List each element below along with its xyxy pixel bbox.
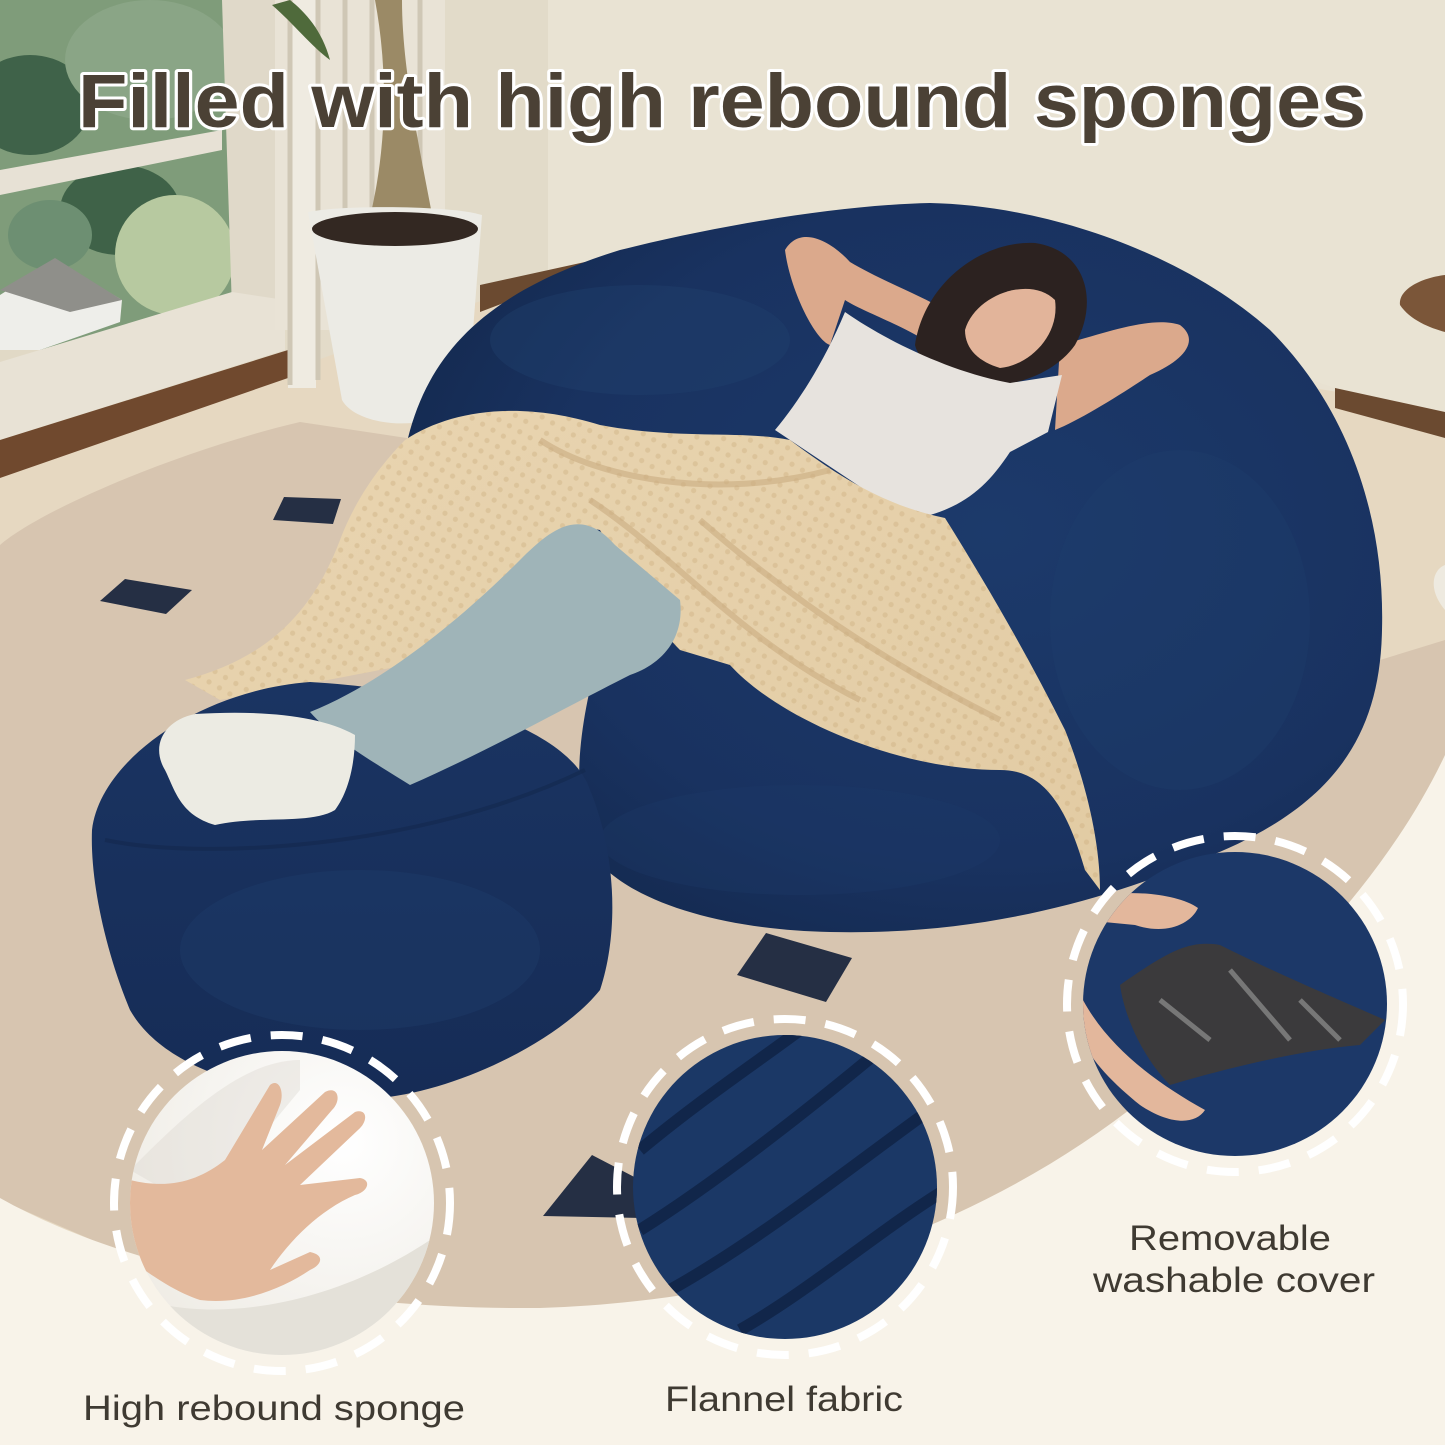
rug diamonds bbox=[100, 497, 852, 1218]
icon: open cover bbox=[1083, 852, 1387, 1156]
callout: flannel fabric bbox=[617, 1019, 953, 1419]
rug bbox=[0, 422, 1445, 1330]
icon: flannel swatch bbox=[633, 1030, 945, 1339]
bean bag bbox=[408, 203, 1382, 932]
curtain bbox=[275, 0, 445, 388]
person: jeans bbox=[310, 524, 681, 785]
person: upper body and head bbox=[775, 237, 1189, 520]
label: Flannel fabric bbox=[665, 1380, 903, 1419]
window with view bbox=[0, 0, 288, 478]
icon: potted plant bbox=[272, 0, 482, 423]
ottoman bbox=[92, 682, 612, 1098]
side table bbox=[1400, 275, 1445, 610]
callout: removable washable cover bbox=[1067, 836, 1403, 1300]
wall corner and skirting bbox=[445, 0, 1445, 438]
callout: high rebound sponge bbox=[83, 1035, 465, 1428]
label: Removable bbox=[1129, 1219, 1331, 1258]
title: Filled with high rebound sponges bbox=[78, 59, 1366, 144]
dashed ring bbox=[617, 1019, 953, 1355]
label: High rebound sponge bbox=[83, 1389, 465, 1428]
icon: sponge circle with hand bbox=[130, 1051, 434, 1360]
callout: removable washable cover: washable cover bbox=[1092, 1261, 1375, 1300]
dashed ring bbox=[114, 1035, 450, 1371]
blanket bbox=[185, 411, 1100, 890]
cream bottom band bbox=[0, 755, 1445, 1445]
dashed ring bbox=[1067, 836, 1403, 1172]
person: socks bbox=[159, 713, 355, 825]
